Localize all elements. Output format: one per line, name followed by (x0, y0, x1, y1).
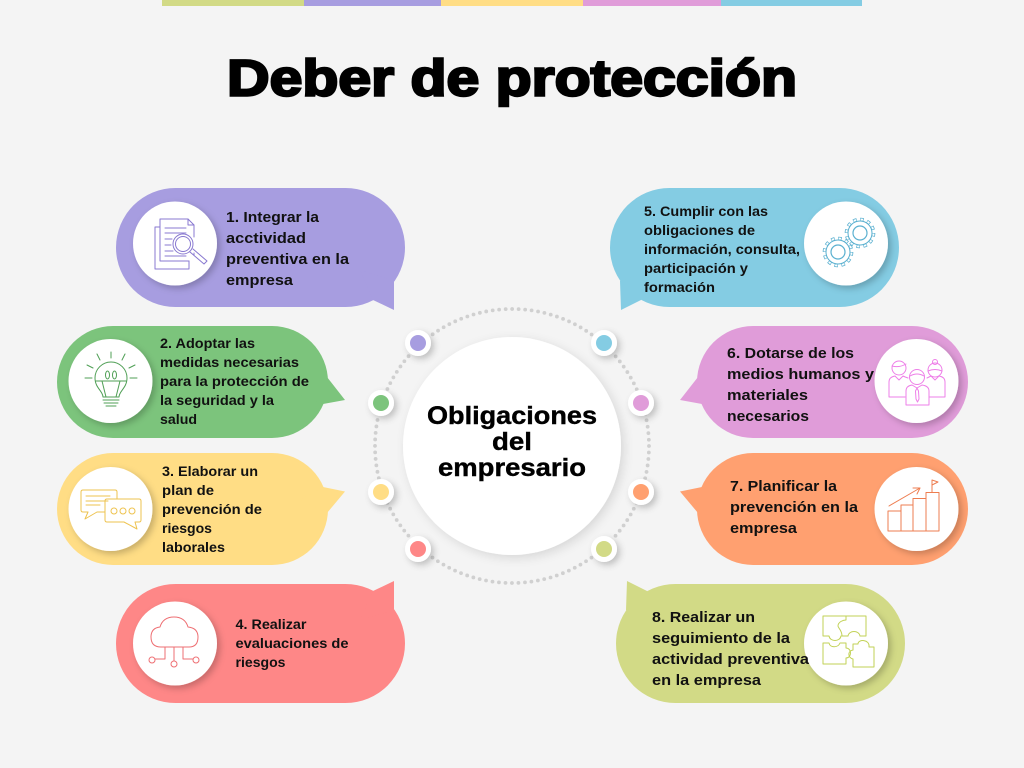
panel 6: medios humanos: medios humanos y (727, 366, 875, 383)
icon: chat bubbles (81, 490, 141, 529)
icon: document with magnifier (155, 219, 207, 269)
panel 7: planificar (680, 453, 968, 565)
panel 5: cumplir obligaciones: obligaciones de (644, 223, 756, 238)
panel 3: plan de prevencion: riesgos (162, 521, 212, 536)
panel 5: cumplir obligaciones: formación (644, 280, 715, 295)
panel 2: adoptar medidas: medidas necesarias (160, 355, 299, 370)
central circle: Obligaciones del empresario: empresario (438, 454, 586, 482)
icon: puzzle pieces (823, 616, 874, 667)
top colour bar (162, 0, 862, 6)
panel 7: planificar: 7. Planificar la (730, 478, 838, 495)
panel 4: evaluaciones de riesgos: evaluaciones de (236, 636, 349, 651)
panel 2: adoptar medidas: 2. Adoptar las (160, 336, 255, 351)
panel 3: plan de prevencion: laborales (162, 540, 225, 555)
panel 1: integrar: acctividad (226, 230, 306, 247)
panel 5: cumplir obligaciones: participación y (644, 261, 749, 276)
panel 5: cumplir obligaciones: 5. Cumplir con las (644, 204, 768, 219)
panel 6: medios humanos: materiales (727, 387, 808, 404)
panel 6: medios humanos (680, 326, 968, 438)
panel 4: evaluaciones de riesgos: 4. Realizar (236, 617, 307, 632)
ring markers (368, 330, 654, 562)
panel 3: plan de prevencion: 3. Elaborar un (162, 464, 258, 479)
panel 1: integrar: 1. Integrar la (226, 209, 320, 226)
panel 1: integrar: preventiva en la (226, 251, 350, 268)
central circle: Obligaciones del empresario: del (492, 428, 532, 456)
panel 5: cumplir obligaciones: información, consulta, (644, 242, 800, 257)
panel 8: seguimiento: 8. Realizar un (652, 609, 755, 626)
panel 2: adoptar medidas (57, 326, 345, 438)
panel 3: plan de prevencion: prevención de (162, 502, 263, 517)
title: Deber de protección (227, 50, 797, 106)
icon: gears (824, 220, 874, 266)
panel 2: adoptar medidas: salud (160, 412, 197, 427)
icon: three people (889, 360, 945, 405)
icon: rising bar chart with flag (888, 480, 939, 531)
panel 8: seguimiento: en la empresa (652, 672, 762, 689)
icon: light bulb (85, 352, 137, 406)
panel 8: seguimiento (616, 581, 905, 703)
panel 1: integrar (116, 188, 405, 310)
panel 5: cumplir obligaciones (610, 188, 899, 310)
panel 6: medios humanos: 6. Dotarse de los (727, 345, 854, 362)
central circle: Obligaciones del empresario (403, 337, 621, 555)
panel 4: evaluaciones de riesgos: riesgos (236, 655, 286, 670)
icon: cloud network (149, 617, 199, 667)
panel 4: evaluaciones de riesgos (116, 581, 405, 703)
panel 8: seguimiento: actividad preventiva (652, 651, 810, 668)
panel 1: integrar: empresa (226, 272, 294, 289)
panel 7: planificar: prevención en la (730, 499, 859, 516)
panel 3: plan de prevencion (57, 453, 345, 565)
panel 2: adoptar medidas: para la protección de (160, 374, 310, 389)
panel 6: medios humanos: necesarios (727, 408, 809, 425)
panel 3: plan de prevencion: plan de (162, 483, 215, 498)
panel 2: adoptar medidas: la seguridad y la (160, 393, 275, 408)
dotted ring (375, 309, 649, 583)
panel 7: planificar: empresa (730, 520, 798, 537)
panel 8: seguimiento: seguimiento de la (652, 630, 791, 647)
central circle: Obligaciones del empresario: Obligaciones (427, 402, 597, 430)
